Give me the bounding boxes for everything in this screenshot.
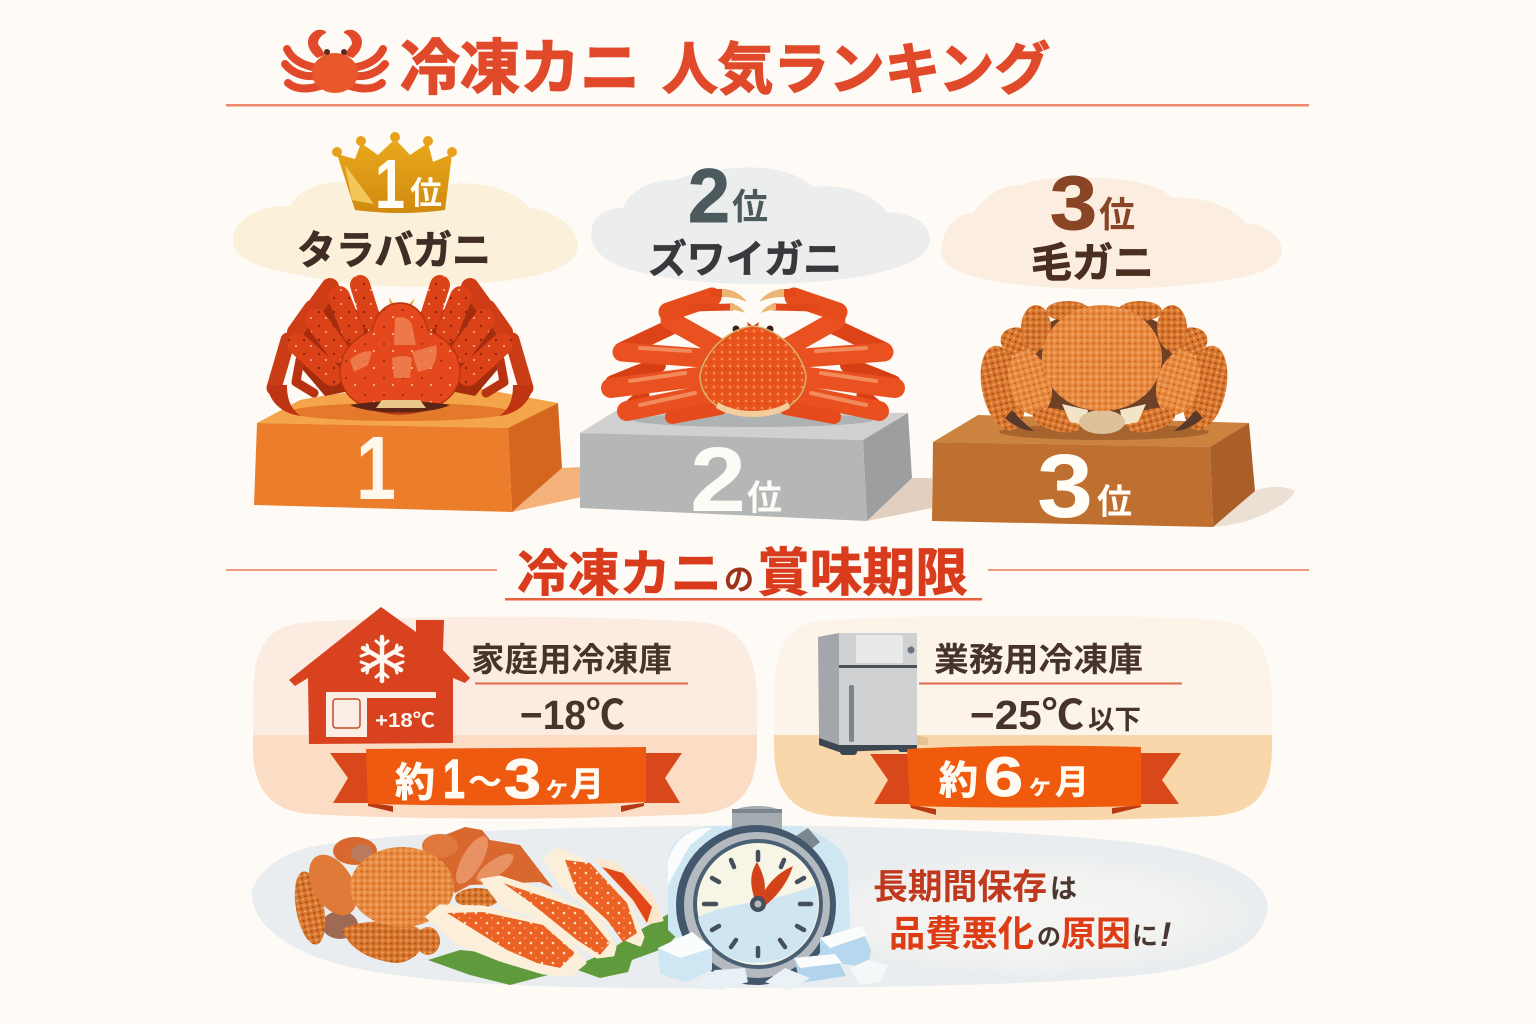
ribbon: 1 to 3 months: 約 [395,761,435,805]
rank label suffix: 位 [1099,194,1135,235]
back crab [422,827,553,908]
rank label: 3 [1050,161,1097,246]
panel background [250,610,760,822]
panel: rank 2 snow crab [580,154,932,531]
panel: rank 3 hair crab [932,161,1295,537]
warning exclamation: ! [1160,916,1171,954]
leaves [428,912,680,985]
storage label: 業務用冷凍庫 [934,641,1143,678]
ribbon: 1 to 3 months: ヶ [544,772,570,802]
species name: ズワイガニ [648,239,842,282]
warning text line 1: 長期間保存 [873,868,1047,907]
podium 3: 位 [1097,483,1132,522]
icon: crown: 位 [410,175,442,211]
podium 2: 2 [690,429,746,531]
icon: crown: 1 [375,145,405,223]
hair crab [290,837,454,963]
crab illustration: king crab [267,285,533,421]
warning text line 2 end: に [1132,921,1158,951]
illustration: crab pile on leaves [290,827,680,985]
icon: house with snowflake [289,607,470,744]
temperature suffix: 以下 [1088,705,1141,735]
ribbon: 6 months: 6 [984,745,1023,808]
panel background [770,610,1280,825]
ribbon: 1 to 3 months: 3 [504,747,541,810]
icon: header crab [285,30,385,93]
ribbon: 1 to 3 months: 月 [570,766,604,804]
temperature: −18℃ [520,692,625,738]
brush background [252,826,1268,988]
icon: crown [332,132,457,223]
warning text particle: の [1037,924,1061,951]
panel: commercial freezer [770,610,1280,825]
section heading particle: の [724,564,754,597]
section title: expiry [226,545,1309,603]
warning text line 2 cause: 原因 [1061,915,1131,954]
crab leg meat 1 [427,906,585,975]
podium 2 [580,410,932,531]
ribbon: 6 months: 月 [1055,764,1089,802]
ice backdrop [668,826,850,950]
podium 2: 位 [747,479,782,518]
ribbon: 6 months [870,745,1181,815]
ribbon: 1 to 3 months: 〜 [468,764,502,802]
temperature: −25℃ [970,692,1084,738]
storage label: 家庭用冷凍庫 [471,641,672,678]
ribbon: 1 to 3 months [330,747,682,812]
icon: freezer [818,633,928,755]
hands [751,862,765,900]
panel: home freezer [250,607,760,822]
title header [285,30,1050,102]
dial ticks [704,852,811,956]
ribbon: 6 months: ヶ [1027,770,1053,800]
crab leg meat 3 [545,849,643,945]
species name: タラバガニ [297,229,491,273]
title text: 冷凍カニ [400,35,640,102]
ice cubes [658,932,712,982]
section heading: 冷凍カニ [517,546,722,602]
crab leg meat 4 [597,860,662,923]
section heading end: 賞味期限 [757,545,968,603]
cloud 3 [941,177,1282,289]
warning text line 1 end: は [1050,874,1077,904]
species name: 毛ガニ [1031,240,1154,286]
rank label: 2 [688,154,730,239]
panel: rank 1 king crab [233,132,582,519]
title text second part: 人気ランキング [662,38,1050,101]
podium 1 [254,387,582,519]
podium 3 [932,415,1295,537]
rank label suffix: 位 [732,186,768,227]
crab illustration: hair crab [974,301,1234,440]
podium 1: 1 [356,419,396,519]
podium 3: 3 [1037,437,1093,537]
ribbon: 1 to 3 months: 1 [443,747,465,810]
icon: stopwatch in ice [658,806,888,991]
ribbon: 6 months: 約 [939,760,978,803]
cloud 2 [591,168,930,284]
crown [732,806,782,832]
crab illustration: snow crab [611,289,895,427]
warning text line 2: 品費悪化 [889,913,1034,954]
cloud 1 [233,182,578,287]
crab leg meat 2 [482,877,615,957]
watch body [712,950,805,977]
panel: warning band [252,806,1268,991]
icon: house with snowflake: +18℃ [375,710,435,732]
